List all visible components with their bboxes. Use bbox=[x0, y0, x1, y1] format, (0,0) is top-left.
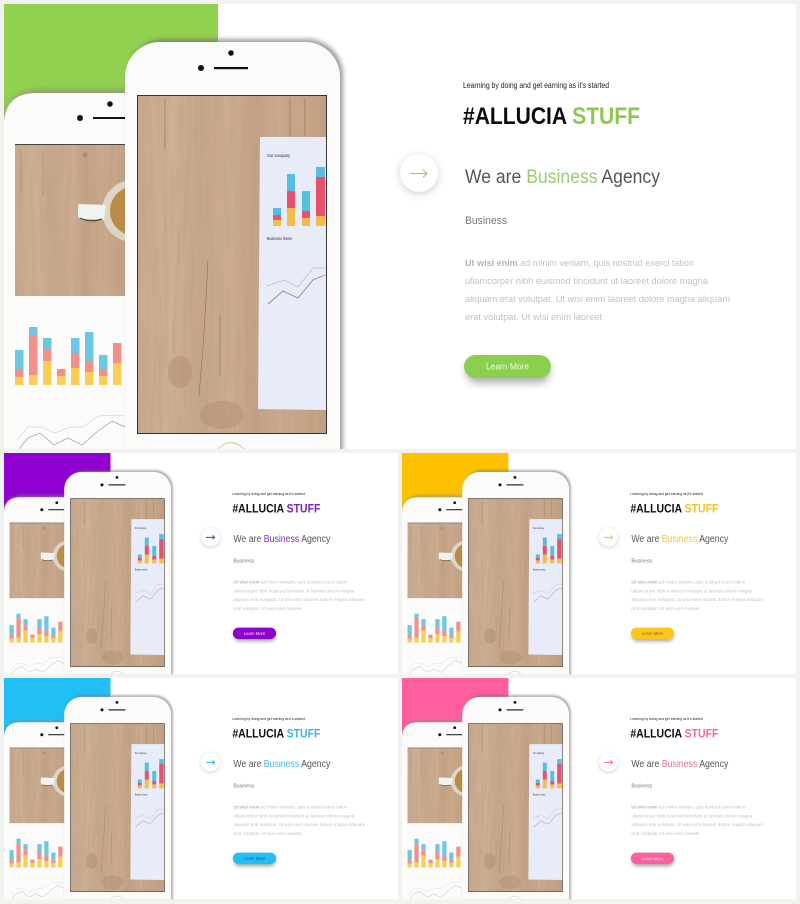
back phone with coffee and bar chart bbox=[4, 494, 64, 674]
tagline: Learning by doing and get earning as it's started bbox=[232, 716, 305, 721]
front phone with wood screen and chart bbox=[462, 470, 571, 701]
icon: arrow button bbox=[201, 528, 220, 548]
panel: purple slide bbox=[4, 453, 398, 674]
subtitle: We are Business Agency bbox=[631, 534, 729, 545]
button: learn more: Learn More bbox=[244, 631, 266, 636]
body text: aliquam erat volutpat. Ut wisi enim laoreet dolore magna aliquam bbox=[465, 294, 730, 305]
icon: arrow button bbox=[201, 753, 220, 773]
body text bbox=[631, 804, 763, 837]
button: learn more bbox=[464, 355, 551, 383]
title: #ALLUCIA STUFF bbox=[630, 727, 718, 741]
body text: erat volutpat. Ut wisi enim laoreet bbox=[465, 312, 602, 323]
label: business: Business bbox=[233, 783, 254, 789]
body text: aliquam erat volutpat. Ut wisi enim laoreet dolore magna aliquam bbox=[233, 822, 365, 828]
body text: aliquam erat volutpat. Ut wisi enim laoreet dolore magna aliquam bbox=[233, 597, 365, 603]
icon: arrow button bbox=[599, 753, 618, 773]
blue colour block bbox=[4, 678, 110, 743]
tagline: Learning by doing and get earning as it's started bbox=[463, 81, 609, 90]
yellow colour block bbox=[402, 453, 508, 518]
icon: arrow button bbox=[400, 154, 438, 194]
front phone with wood screen and chart bbox=[64, 470, 173, 701]
front phone with wood screen and chart bbox=[462, 695, 571, 904]
purple colour block bbox=[4, 453, 110, 518]
back phone with coffee and bar chart bbox=[402, 494, 462, 674]
label: business: Business bbox=[465, 215, 507, 227]
subtitle: We are Business Agency bbox=[465, 166, 660, 188]
body text: aliquam erat volutpat. Ut wisi enim laoreet dolore magna aliquam bbox=[631, 597, 763, 603]
body text: erat volutpat. Ut wisi enim laoreet bbox=[631, 831, 700, 837]
button: learn more: Learn More bbox=[244, 856, 266, 861]
green colour block bbox=[4, 4, 218, 134]
tagline: Learning by doing and get earning as it's started bbox=[232, 491, 305, 496]
button: learn more: Learn More bbox=[642, 631, 664, 636]
body text: erat volutpat. Ut wisi enim laoreet bbox=[631, 606, 700, 612]
button: learn more bbox=[631, 853, 674, 867]
body text bbox=[465, 258, 730, 323]
title: #ALLUCIA STUFF bbox=[463, 103, 640, 130]
button: learn more bbox=[233, 853, 276, 867]
button: learn more bbox=[233, 628, 276, 642]
body text: ullamcorper nibh euismod tincidunt ut laoreet dolore magna bbox=[233, 813, 355, 819]
body text: erat volutpat. Ut wisi enim laoreet bbox=[233, 831, 302, 837]
title: #ALLUCIA STUFF bbox=[232, 727, 320, 741]
panel: yellow slide bbox=[402, 453, 796, 674]
body text bbox=[233, 804, 365, 837]
body text: aliquam erat volutpat. Ut wisi enim laoreet dolore magna aliquam bbox=[631, 822, 763, 828]
subtitle: We are Business Agency bbox=[631, 759, 729, 770]
panel: blue slide bbox=[3, 678, 398, 904]
icon: arrow button bbox=[599, 528, 618, 548]
subtitle: We are Business Agency bbox=[233, 759, 331, 770]
body text: Ut wisi enim ad minim veniam, quis nostrud exerci tation bbox=[233, 804, 348, 810]
button: learn more: Learn More bbox=[642, 856, 664, 861]
body text: ullamcorper nibh euismod tincidunt ut laoreet dolore magna bbox=[233, 588, 355, 594]
body text: ullamcorper nibh euismod tincidunt ut laoreet dolore magna bbox=[631, 813, 753, 819]
back phone with coffee and bar chart bbox=[4, 718, 64, 900]
body text: Ut wisi enim ad minim veniam, quis nostrud exerci tation bbox=[631, 579, 746, 585]
label: business: Business bbox=[631, 783, 652, 789]
body text: Ut wisi enim ad minim veniam, quis nostrud exerci tation bbox=[631, 804, 746, 810]
pink colour block bbox=[402, 678, 508, 743]
body text: ullamcorper nibh euismod tincidunt ut laoreet dolore magna bbox=[465, 276, 709, 287]
body text: ullamcorper nibh euismod tincidunt ut laoreet dolore magna bbox=[631, 588, 753, 594]
title: #ALLUCIA STUFF bbox=[232, 502, 320, 516]
label: business: Business bbox=[233, 558, 254, 564]
panel: pink slide bbox=[401, 678, 796, 904]
panel: green slide bbox=[4, 4, 796, 449]
tagline: Learning by doing and get earning as it's started bbox=[630, 491, 703, 496]
front phone with wood screen and chart bbox=[64, 695, 173, 904]
back phone with coffee and bar chart bbox=[4, 87, 125, 449]
front phone with wood screen and chart bbox=[125, 39, 343, 502]
button: learn more: Learn More bbox=[486, 362, 529, 372]
body text: Ut wisi enim ad minim veniam, quis nostrud exerci tation bbox=[465, 258, 694, 269]
subtitle: We are Business Agency bbox=[233, 534, 331, 545]
body text: erat volutpat. Ut wisi enim laoreet bbox=[233, 606, 302, 612]
tagline: Learning by doing and get earning as it's started bbox=[630, 716, 703, 721]
back phone with coffee and bar chart bbox=[401, 720, 482, 899]
body text: Ut wisi enim ad minim veniam, quis nostrud exerci tation bbox=[233, 579, 348, 585]
button: learn more bbox=[631, 628, 674, 642]
title: #ALLUCIA STUFF bbox=[630, 502, 718, 516]
body text bbox=[631, 579, 763, 612]
body text bbox=[233, 579, 365, 612]
label: business: Business bbox=[631, 558, 652, 564]
